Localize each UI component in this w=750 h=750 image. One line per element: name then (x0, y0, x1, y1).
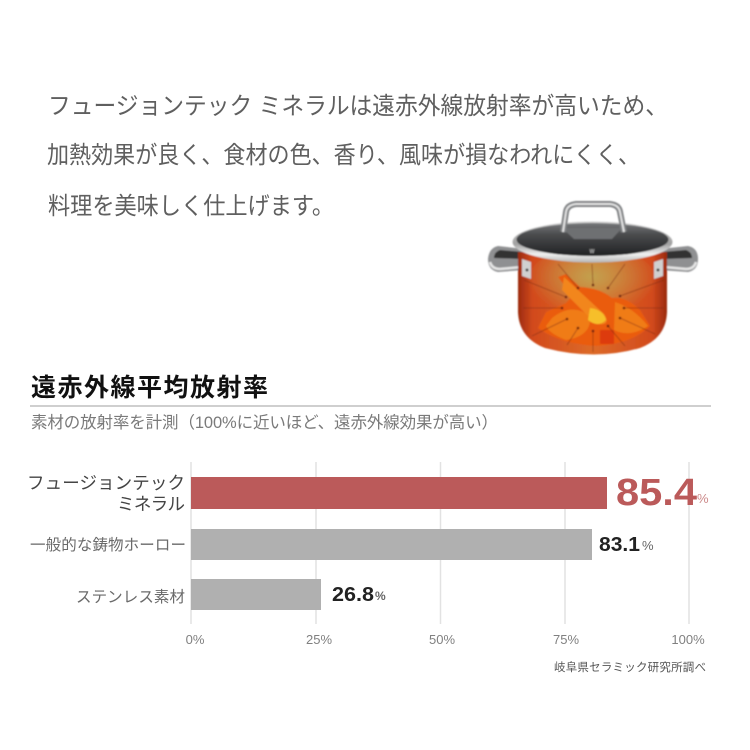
lid knob handle (563, 204, 624, 232)
value: 26.8%: 26.8 (332, 584, 374, 606)
brand mark: W (590, 249, 595, 255)
value: 26.8%: % (375, 589, 386, 603)
bar chart (27, 462, 709, 647)
pot body (518, 252, 667, 354)
intro text block: フュージョンテック ミネラルは遠赤外線放射率が高いため、 (48, 93, 668, 120)
x axis labels: 50% (429, 632, 455, 647)
x axis labels: 75% (553, 632, 579, 647)
roast chicken illustration (538, 274, 650, 346)
category label: cast enamel: 一般的な鋳物ホーロー (30, 536, 186, 554)
x axis labels (186, 632, 705, 647)
x axis labels: 100% (671, 632, 705, 647)
chart heading: 遠赤外線平均放射率 (31, 374, 268, 402)
heat arrows (523, 264, 664, 352)
intro text block (47, 93, 668, 220)
lid knob base (562, 228, 622, 239)
chart subtitle: 素材の放射率を計測（100%に近いほど、遠赤外線効果が高い） (31, 413, 498, 432)
right handle (660, 246, 698, 272)
value: 85.4%: 85.4 (616, 472, 697, 514)
category label: stainless: ステンレス素材 (76, 588, 185, 606)
value: 83.1%: 83.1 (599, 534, 640, 556)
x axis labels: 25% (306, 632, 332, 647)
value: 85.4%: % (697, 491, 709, 506)
intro text block: 料理を美味しく仕上げます。 (48, 193, 334, 220)
category label: Fusiontec Mineral: ミネラル (117, 494, 185, 514)
bar: cast enamel (191, 529, 592, 560)
bar: Fusiontec Mineral (191, 477, 607, 509)
x axis labels: 0% (186, 632, 205, 647)
category label: Fusiontec Mineral: フュージョンテック (27, 473, 185, 493)
value: 83.1%: % (642, 538, 654, 553)
intro text block: 加熱効果が良く、食材の色、香り、風味が損なわれにくく、 (47, 142, 640, 169)
left handle (488, 246, 524, 272)
bar: stainless (191, 579, 321, 610)
handle rivets (522, 259, 531, 279)
lid rim (512, 222, 672, 262)
category label: Fusiontec Mineral (27, 473, 185, 514)
heading divider (30, 405, 711, 407)
glass lid (516, 223, 668, 256)
icon: orange pot with radiating heat arrows (488, 204, 698, 354)
source note: 岐阜県セラミック研究所調べ (554, 660, 706, 674)
